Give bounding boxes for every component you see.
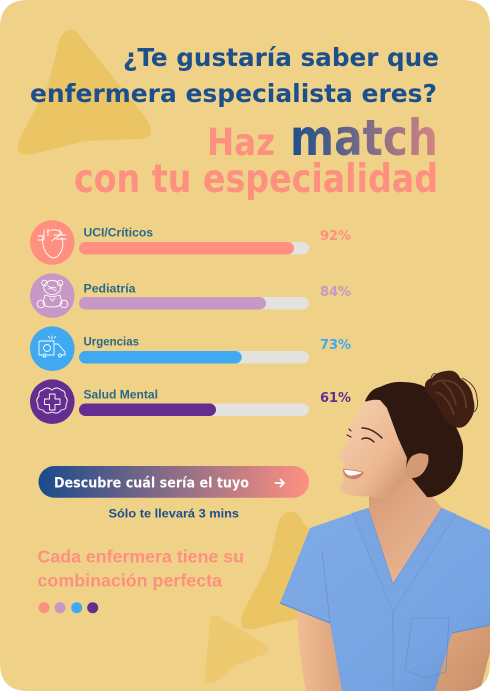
eye and brow (347, 428, 382, 442)
row: UCI/Críticos: UCI/Críticos (84, 226, 153, 240)
heading: question: enfermera especialista eres? (30, 79, 437, 108)
shirt (280, 508, 490, 691)
heading: haz match (207, 109, 438, 167)
row: Salud Mental: 61% (320, 390, 351, 406)
tagline (38, 547, 244, 591)
decorative triangle bottom (205, 615, 268, 683)
row: UCI/Críticos: 92% (320, 228, 351, 244)
row: Salud Mental: Salud Mental (84, 388, 158, 402)
heading: haz match: Haz (207, 121, 275, 164)
row: Urgencias: 73% (320, 337, 351, 353)
row: Urgencias (30, 326, 351, 371)
arms (297, 612, 342, 691)
row: UCI/Críticos (30, 220, 351, 265)
neck (369, 470, 444, 585)
smile (343, 469, 364, 479)
row: Urgencias: Urgencias (84, 335, 139, 349)
heading: question: ¿Te gustaría saber que (123, 43, 439, 72)
heading: con tu especialidad: con tu especialidad (74, 157, 438, 202)
ear (405, 453, 429, 478)
icon: teddy bear (37, 280, 68, 308)
icon: arrow (276, 480, 284, 486)
row: Pediatría: Pediatría (84, 282, 136, 296)
face (339, 400, 407, 500)
decorative triangle top (18, 29, 151, 155)
icon: ambulance (39, 336, 65, 357)
heading: haz match: match (290, 109, 438, 167)
row: Pediatría: 84% (320, 284, 351, 300)
icon: heart (38, 229, 66, 258)
tagline: Cada enfermera tiene su (38, 547, 244, 567)
row: Salud Mental (30, 379, 351, 424)
decorative triangle right (241, 512, 340, 629)
row: Pediatría (30, 273, 351, 318)
color dots (38, 602, 98, 613)
button (38, 466, 309, 498)
photo: nurse (280, 371, 490, 691)
icon: brain with cross (37, 388, 67, 413)
hair back (365, 382, 463, 497)
tagline: combinación perfecta (38, 571, 222, 591)
hair bun (425, 371, 478, 428)
note: time: Sólo te llevará 3 mins (108, 507, 239, 521)
button: Descubre cuál sería el tuyo (54, 476, 249, 492)
heading: question (30, 43, 439, 108)
